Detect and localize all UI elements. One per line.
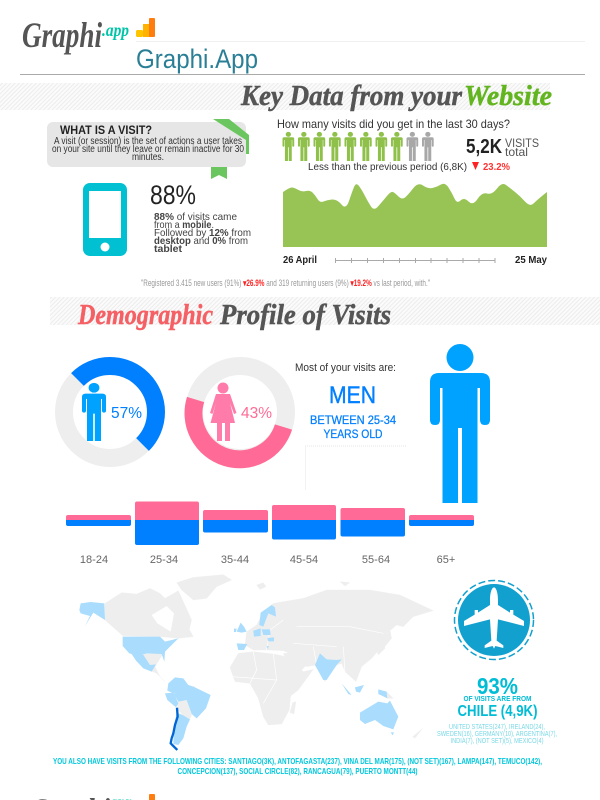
- stat: visits from Chile: OF VISITS ARE FROM: [464, 694, 532, 703]
- text: device breakdown: Followed by 12% from: [154, 227, 251, 239]
- age labels: 18-24: [80, 554, 108, 566]
- stat: total visits: total: [505, 145, 528, 159]
- dashed connector: [306, 446, 406, 490]
- summary: most visits: MEN: [329, 382, 376, 409]
- text: device breakdown: 88% of visits came: [154, 211, 237, 223]
- heading: Demographic Profile of Visits: [77, 299, 391, 331]
- chart end date: 25 May: [515, 254, 547, 266]
- note: new and returning users: "Registered 3.415 new users (91%) ▾26.9% and 319 returning users (9%) ▾19.2% vs last period, with.": [141, 278, 430, 288]
- heading: Demographic Profile of Visits: Demographic: [77, 299, 213, 331]
- visit heading: WHAT IS A VISIT?: [60, 123, 152, 137]
- airplane: [464, 587, 524, 649]
- age labels: [80, 554, 455, 566]
- age labels: 55-64: [362, 554, 390, 566]
- men percentage: 57%: [111, 405, 142, 422]
- visit description: on your site until they leave or remain inactive for 30: [52, 144, 244, 155]
- list: other countries: INDIA(7), (NOT SET)(5), MEXICO(4): [450, 738, 544, 745]
- stat: total visits: VISITS: [505, 136, 539, 150]
- header rule: [136, 41, 585, 42]
- comparison with previous period: 23.2%: [483, 161, 511, 173]
- summary: most visits: BETWEEN 25-34: [310, 415, 397, 427]
- icon: woman: [210, 382, 236, 441]
- question: visits in last 30 days: How many visits did you get in the last 30 days?: [277, 117, 510, 131]
- icon: analytics bars: [136, 18, 155, 37]
- world map: [79, 575, 433, 750]
- area chart: daily visits: [283, 184, 547, 247]
- heading band: key data: [0, 83, 550, 110]
- visit description: A visit (or session) is the set of actions a user takes: [54, 136, 242, 147]
- pictogram: visit people: [282, 132, 434, 161]
- hudson bay: [152, 606, 174, 632]
- summary: most visits: [295, 362, 397, 441]
- age labels: 35-44: [221, 554, 249, 566]
- list: other countries: UNITED STATES(247), IRELAND(24),: [449, 724, 545, 731]
- women percentage: 43%: [241, 405, 272, 422]
- stat: total visits: [466, 136, 539, 159]
- list: cities: CONCEPCION(137), SOCIAL CIRCLE(82), RANCAGUA(79), PUERTO MONTT(44): [178, 766, 418, 776]
- donut chart: women 43%: [193, 366, 286, 459]
- text: device breakdown: [154, 211, 251, 255]
- stat: total visits: 5,2K: [466, 136, 502, 158]
- summary: most visits: Most of your visits are:: [295, 362, 396, 374]
- text: device breakdown: desktop and 0% from: [154, 235, 248, 247]
- donut chart: men 57%: [64, 366, 156, 458]
- logo: Graphi.app: .app: [102, 20, 129, 40]
- text: device breakdown: tablet: [154, 243, 182, 255]
- map borders: [232, 620, 383, 703]
- header divider: [20, 74, 585, 75]
- logo: Graphi.app: Graphi: [22, 15, 102, 55]
- age labels: 25-34: [150, 554, 178, 566]
- chart start date: 26 April: [283, 254, 317, 266]
- visit description: [52, 136, 244, 163]
- heading: Demographic Profile of Visits: Profile of Visits: [219, 299, 391, 331]
- heading: Key Data from your Website: Website: [464, 80, 552, 112]
- icon: large man: [430, 344, 490, 503]
- icon: man: [82, 383, 106, 441]
- panel: what is a visit: [47, 119, 249, 179]
- bar chart: age groups: [66, 502, 474, 566]
- ribbon fold: [213, 119, 249, 154]
- visit description: minutes.: [132, 152, 164, 163]
- stat: visits from Chile: [458, 673, 538, 720]
- list: cities: [53, 756, 542, 776]
- list: other countries: [437, 724, 557, 745]
- site name: Graphi.App: [136, 44, 258, 74]
- heading: Key Data from your Website: Key Data from your: [240, 80, 463, 112]
- summary: most visits: YEARS OLD: [324, 429, 382, 441]
- timeline axis: [336, 258, 495, 263]
- ribbon tail: [211, 165, 227, 179]
- list: other countries: SWEDEN(16), GERMANY(10), ARGENTINA(7),: [437, 731, 557, 738]
- stat: 88% mobile: 88%: [150, 180, 196, 210]
- icon: airplane badge: [454, 580, 534, 660]
- age labels: 45-54: [290, 554, 318, 566]
- stat: visits from Chile: CHILE (4,9K): [458, 703, 538, 720]
- text: device breakdown: from a mobile.: [154, 219, 214, 231]
- heading band: demographic: [50, 297, 600, 325]
- age labels: 65+: [437, 554, 455, 566]
- comparison with previous period: Less than the previous period (6,8K): [308, 161, 467, 173]
- icon: mobile phone: [83, 183, 127, 256]
- stat: visits from Chile: 93%: [477, 673, 518, 699]
